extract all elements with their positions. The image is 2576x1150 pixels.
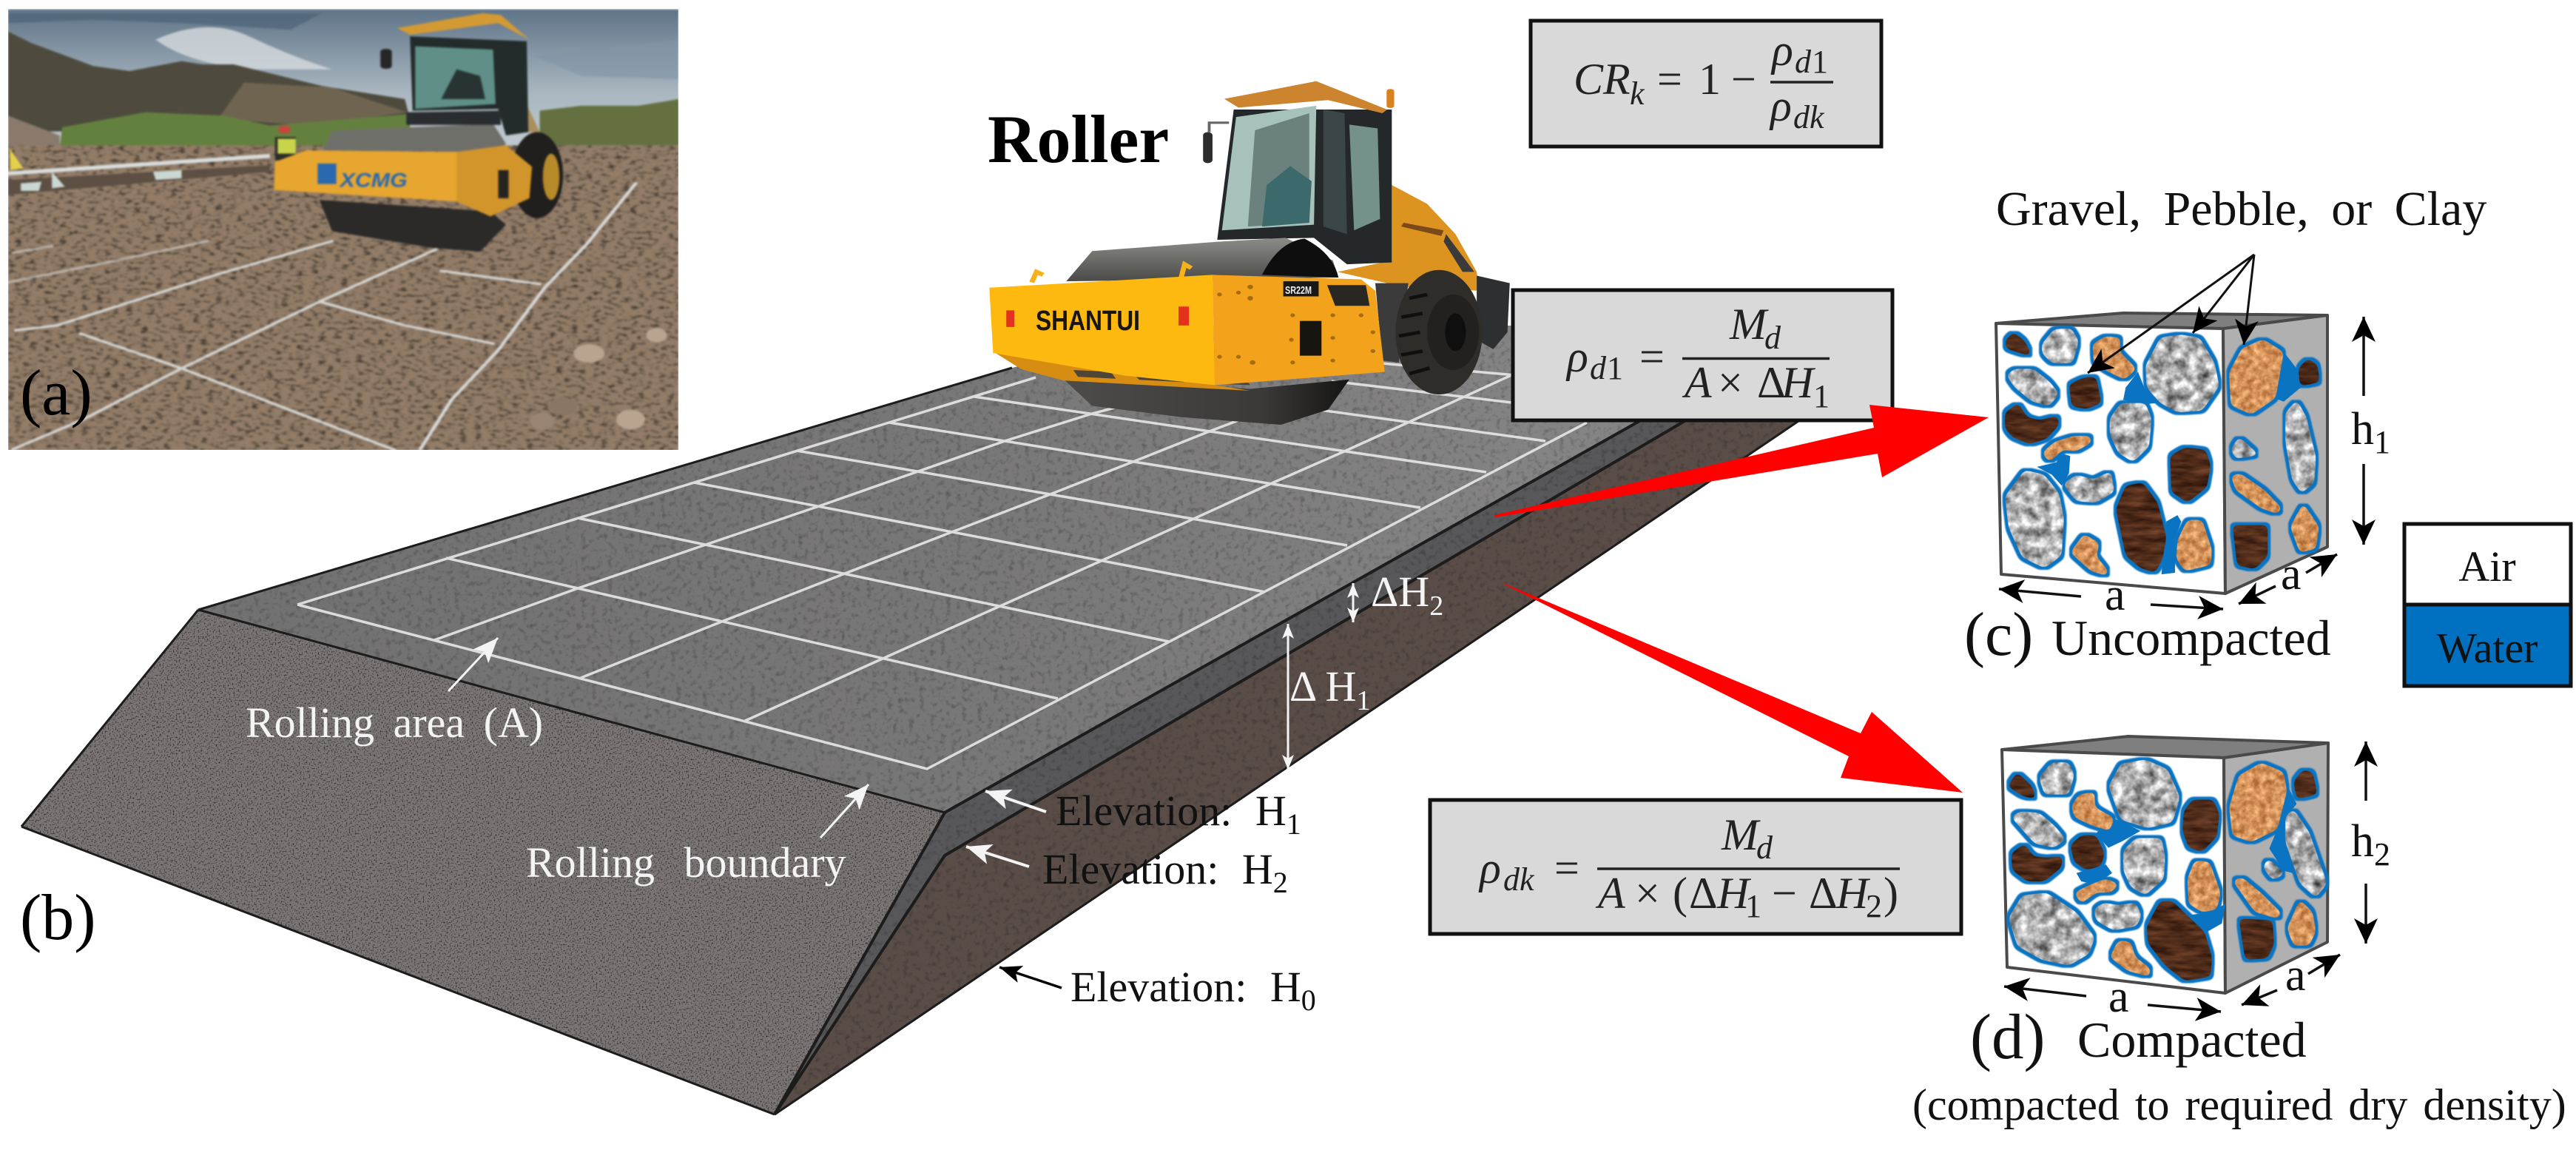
formula box: compaction ratio [1531,21,1881,147]
formula box: compacted dry density: d [1756,830,1773,866]
water on side face [2274,352,2302,402]
formula box: compacted dry density: ρ [1478,844,1501,892]
label (a): (a) [20,357,92,429]
formula box: uncompacted dry density: A [1682,358,1712,407]
formula box: compacted dry density: ) [1884,869,1898,918]
formula box: uncompacted dry density: d [1590,350,1607,386]
formula box: uncompacted dry density: 1 [1607,350,1623,386]
formula box: compacted dry density: H [1835,869,1871,918]
formula box: compacted dry density [1430,800,1961,934]
gravel: gray stones [2009,759,2327,966]
rear body [1338,185,1479,291]
formula box: compaction ratio: d [1795,44,1812,80]
panel (a): site photograph of roller on gridded test section [8,9,679,451]
slab edge lines [21,368,1798,1114]
dimension: delta H2: 2 [1429,591,1443,622]
photo scene: XCMG [339,169,408,192]
formula box: compacted dry density: × [1635,869,1660,918]
dimension labels: a: a [2285,950,2306,1001]
formula box: uncompacted dry density: H [1781,358,1816,407]
dimension: delta H2 [1353,568,1443,622]
formula box: compaction ratio: k [1630,75,1645,112]
body side face [1213,275,1385,385]
label: elevation H0: 0 [1301,983,1316,1017]
roller machine illustration [989,81,1510,425]
heading: Roller: Roller [988,101,1169,177]
pebble: orange stones [2042,336,2319,576]
upper drum [1066,238,1338,281]
label: rolling area [246,638,543,747]
label: elevation H2: 2 [1273,866,1288,899]
hooks [1032,264,1191,283]
water on front face [2077,817,2225,933]
formula box: compaction ratio: ρ [1770,26,1793,75]
formula box: compacted dry density: H [1716,869,1752,918]
label: rolling boundary [526,784,869,887]
arrow: compacted layer to panel d [1503,583,1963,793]
dimension: delta H1 [1288,624,1370,770]
formula box: uncompacted dry density: ρ [1565,332,1588,381]
label (d) Compacted: (d) [1970,1001,2045,1072]
label (d) Compacted [1970,1001,2307,1072]
panel (c): uncompacted soil cube [1964,313,2390,669]
water on front face [2037,372,2181,574]
dimension labels: a [2105,549,2302,620]
formula box: compacted dry density: dk [1503,861,1535,898]
dimension: height h2 [2351,742,2390,944]
rear bracket [1477,275,1510,349]
formula box: uncompacted dry density: Δ [1757,358,1786,407]
rolling grid [297,359,1587,769]
caption: compacted to required dry density: (compacted to required dry density) [1912,1080,2566,1129]
label (c) Uncompacted: (c) [1964,600,2033,669]
formula box: compacted dry density: ( [1673,869,1687,918]
lower drum [1064,380,1349,425]
clay: brown stones [2007,770,2318,981]
label: gravel, pebble, or clay with pointers [1996,182,2486,373]
label (c) Uncompacted [1964,600,2331,669]
label: elevation H1: 1 [1287,807,1301,841]
formula box: compacted dry density: 2 [1866,888,1882,924]
photo roller cab [527,107,540,133]
formula box: compacted dry density: A [1595,869,1625,918]
underside [996,353,1250,391]
dimension labels: a: a [2108,972,2129,1022]
tail lights [1006,310,1014,327]
dimension labels: a: a [2105,570,2125,620]
formula box: compaction ratio: dk [1793,99,1825,135]
label: elevation H2 [966,845,1288,899]
label: elevation H1: Elevation: H [1056,787,1287,835]
gravel: gray stones [2005,329,2316,568]
water on side face [2269,788,2296,874]
dimension: height h2: 2 [2374,836,2390,872]
rear wheel [1395,270,1483,394]
formula box: compaction ratio: − [1731,55,1756,104]
photo scene [8,9,679,451]
formula box: compaction ratio: ρ [1769,81,1792,130]
cab roof [1224,81,1387,113]
dimension: delta H2: ΔH [1371,568,1429,616]
body front face [989,275,1215,385]
dimension: delta H1: 1 [1356,685,1370,716]
dimension labels: a [2108,950,2306,1022]
arrow: uncompacted layer to panel c [1494,405,1989,517]
formula box: compaction ratio: = [1657,55,1682,104]
label: rolling area: Rolling area (A) [246,699,543,747]
formula box: compacted dry density: Δ [1809,869,1838,918]
brand text: SHANTUI [1036,306,1140,337]
formula box: compacted dry density: − [1772,869,1797,918]
label: elevation H0 [999,963,1316,1017]
dimension: height h1: h [2351,404,2374,454]
label (d) Compacted: Compacted [2077,1012,2307,1068]
formula box: compacted dry density: Δ [1689,869,1718,918]
label: elevation H0: Elevation: H [1070,963,1301,1011]
label: gravel, pebble, or clay with pointers: Gravel, Pebble, or Clay [1996,182,2486,236]
dimension labels: a: a [2281,549,2302,599]
cube faces [2002,736,2328,993]
legend: air and water: Water [2436,624,2538,672]
formula box: compaction ratio: CR [1574,55,1631,104]
photo rocks [530,328,667,430]
top rolled surface [198,326,1702,813]
side face: dark compaction band [775,421,1685,1114]
cab [1217,110,1392,264]
dimension: height h1 [2351,317,2390,545]
clay: brown stones [2005,332,2320,573]
photo roller body [273,149,459,203]
panel (b): compaction test embankment [21,326,1798,1114]
photo roller drum [323,124,506,152]
formula box: uncompacted dry density: 1 [1813,378,1830,414]
label: rolling boundary: Rolling boundary [526,838,846,887]
formula box: uncompacted dry density: d [1764,320,1781,356]
formula box: compacted dry density: 1 [1745,888,1761,924]
legend: air and water [2404,524,2571,686]
side mirror [1209,123,1229,132]
side face: brown base layer [775,421,1798,1114]
dimension: delta H1: Δ H [1289,662,1356,710]
dimension: height h1: 1 [2374,424,2390,460]
panel (d): compacted soil cube [1912,736,2566,1129]
label (b): (b) [20,882,96,954]
formula box: compaction ratio: 1 [1812,44,1828,80]
formula box: compacted dry density: = [1554,844,1579,892]
formula box: compaction ratio: 1 [1699,55,1721,104]
label (c) Uncompacted: Uncompacted [2051,610,2331,666]
cube faces [1996,313,2327,594]
label: elevation H2: Elevation: H [1042,845,1273,893]
dimension arrows: width a [2004,955,2340,1012]
dimension arrows: width a [1999,554,2337,609]
formula box: uncompacted dry density: × [1718,358,1743,407]
dimension: height h2: h [2351,816,2374,867]
pebble: orange stones [2071,762,2316,977]
model plate: SR22M [1285,284,1312,297]
front slope [21,610,945,1114]
label: elevation H1 [985,787,1301,841]
formula box: uncompacted dry density: = [1639,332,1665,381]
formula box: uncompacted dry density: M [1729,300,1769,349]
legend: air and water: Air [2458,542,2516,591]
formula box: uncompacted dry density [1513,290,1892,420]
formula box: compacted dry density: M [1721,810,1761,859]
chalk grid lines [8,184,635,450]
